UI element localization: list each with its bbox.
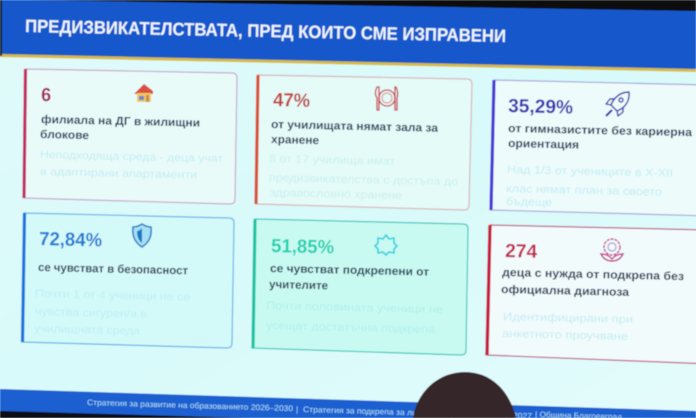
title: ПРЕДИЗВИКАТЕЛСТВАТА, ПРЕД КОИТО СМЕ ИЗПРАВЕНИ [25, 16, 506, 46]
heading text: ориентация [508, 138, 579, 152]
description text: предизвикателства с достъпа до [269, 172, 458, 188]
heading text: хранене [271, 134, 319, 147]
description text: чувства сигурен/а в [35, 306, 147, 321]
footer text [87, 398, 623, 418]
heading text [271, 119, 439, 147]
description text [40, 149, 223, 182]
heading text: от училищата нямат зала за [271, 119, 439, 135]
heading text: деца с нужда от подкрепа без [502, 267, 684, 283]
panel: kindergarten branches [24, 69, 237, 204]
heading text: от гимназистите без кариерна [508, 123, 693, 139]
heading text: се чувстват в безопасност [38, 262, 189, 277]
footer text: | [296, 405, 298, 414]
icon: rocket [606, 92, 629, 116]
description text: Почти половината ученици не [266, 300, 443, 316]
description text: анкетното проучване [502, 328, 628, 343]
description text: здравословно хранене [270, 187, 402, 202]
footer text: Стратегия за развитие на образованието 2026–2030 [87, 398, 294, 413]
statistic: 51,85%: 51,85% [271, 236, 334, 258]
footer band [0, 389, 696, 418]
heading text: блокове [40, 129, 89, 142]
description text: Почти 1 от 4 ученици не се [35, 288, 190, 304]
statistic: 6: 6 [41, 85, 51, 106]
description text [266, 300, 443, 336]
description text [506, 164, 673, 209]
heading text [269, 263, 430, 292]
statistic: 35,29%: 35,29% [508, 96, 573, 118]
description text [502, 311, 633, 343]
description text: усещат достатъчна подкрепа [266, 320, 436, 336]
description text: в адаптирани апартаменти [40, 166, 197, 182]
description text [34, 288, 190, 337]
description text: Идентифицирани при [503, 311, 633, 326]
heading text [508, 123, 693, 152]
description text: клас нямат план за своето [506, 183, 662, 199]
description text: училищната среда [34, 323, 141, 337]
panel: teacher support [252, 219, 468, 355]
panel: career orientation [490, 80, 696, 216]
statistic: 274: 274 [505, 241, 538, 263]
heading text: официална диагноза [501, 284, 630, 299]
description text: 8 от 17 училища имат [269, 153, 395, 168]
statistic: 47%: 47% [273, 90, 310, 112]
description text: бъдеще [506, 196, 552, 209]
heading text [40, 114, 200, 142]
heading text: филиала на ДГ в жилищни [41, 114, 200, 130]
icon: house [134, 84, 153, 102]
heading text [501, 267, 684, 299]
icon: lotus flower [601, 239, 623, 261]
statistic: 72,84%: 72,84% [39, 229, 102, 251]
header band [0, 0, 696, 72]
audience member head [413, 372, 516, 418]
description text [269, 153, 458, 202]
icon: shield [133, 224, 151, 247]
panel: safety [22, 213, 234, 348]
heading text: учителите [269, 279, 328, 292]
panel: school dining halls [256, 75, 472, 210]
icon: star [375, 235, 397, 255]
description text: Над 1/3 от учениците в X-XII [507, 164, 673, 180]
heading text: се чувстват подкрепени от [270, 263, 430, 279]
panel: children needing support [486, 225, 696, 364]
description text: Неподходяща среда - деца учат [40, 149, 223, 165]
icon: plate and cutlery [376, 87, 398, 110]
